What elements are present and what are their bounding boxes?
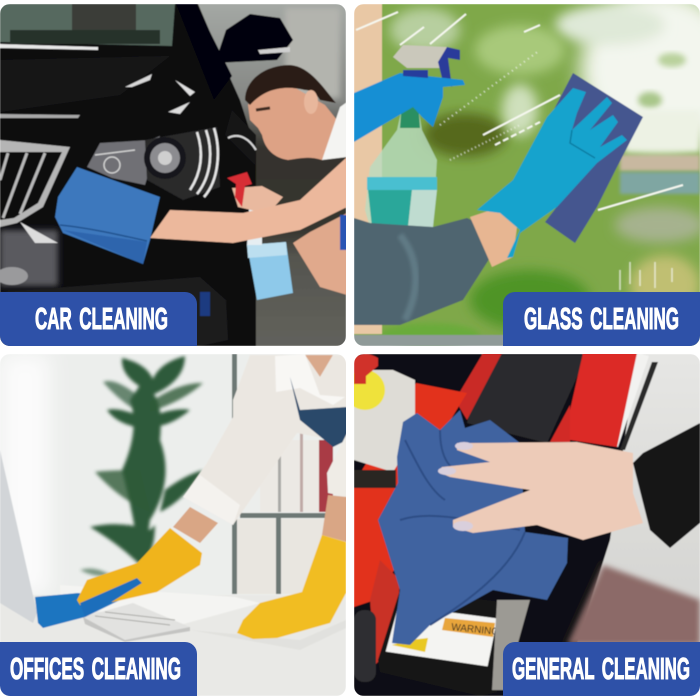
red trigger [227, 172, 252, 207]
panel: general cleaning [345, 353, 700, 696]
label: glass cleaning [503, 292, 700, 346]
head [248, 85, 345, 160]
yellow circle [345, 370, 385, 410]
nails [438, 442, 473, 531]
main arm [150, 157, 347, 243]
panel: glass cleaning [354, 0, 700, 347]
hand [438, 442, 643, 540]
blue towel [35, 593, 120, 628]
black base and warning label [378, 590, 510, 696]
cleaning cloth [540, 73, 643, 243]
wheel [354, 610, 376, 682]
shelves [232, 354, 346, 594]
keyboard [102, 603, 182, 626]
hand on bottle [232, 186, 283, 214]
right glove [477, 88, 627, 258]
man arm rear [293, 213, 347, 295]
grey control box [354, 370, 415, 472]
black belt [467, 355, 587, 443]
machine photo: WARNING [451, 622, 500, 638]
right yellow glove [237, 535, 346, 639]
laptop [0, 450, 37, 623]
sleeve [354, 218, 493, 325]
blue rag [378, 410, 568, 645]
black sleeve [633, 423, 700, 548]
plant [80, 356, 203, 576]
label text: OFFICES CLEANING [10, 651, 181, 686]
shirt [305, 355, 333, 377]
left yellow glove [77, 528, 202, 605]
glass cleaning photo [354, 0, 700, 347]
red housing [570, 353, 637, 447]
blue towel [55, 167, 160, 264]
spray bottle [364, 114, 438, 224]
spray bottle [247, 242, 293, 300]
label: general cleaning [503, 642, 700, 696]
panel: offices cleaning [0, 354, 347, 696]
label text: CAR CLEANING [35, 301, 168, 336]
office photo [0, 354, 347, 696]
forearm [470, 208, 517, 267]
panel: car cleaning [0, 4, 348, 346]
label: car cleaning [0, 292, 197, 346]
machine photo [345, 353, 700, 696]
label: offices cleaning [0, 642, 197, 696]
red stop button [354, 354, 378, 384]
car cleaning photo [0, 4, 348, 346]
left glove [354, 73, 465, 142]
table [34, 596, 42, 598]
